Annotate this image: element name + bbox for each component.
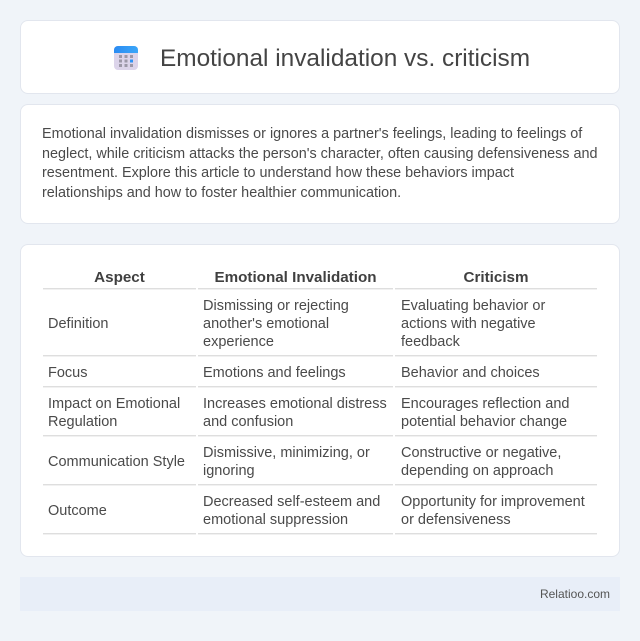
row: Communication Style: Communication Style (48, 454, 185, 470)
panel: comparison table (20, 244, 620, 557)
intro text: Emotional invalidation dismisses or ignores a partner's feelings, leading to feelings of (42, 126, 582, 142)
comparison table: feedback (401, 334, 460, 350)
panel: title card (20, 20, 620, 94)
comparison table: and confusion (203, 414, 293, 430)
title: Emotional invalidation vs. criticism (160, 45, 530, 72)
comparison table: Evaluating behavior or (401, 298, 545, 314)
comparison table: another's emotional (203, 316, 329, 332)
header: Emotional Invalidation: Emotional Invalidation (214, 269, 376, 286)
comparison table: Behavior and choices (401, 365, 540, 381)
intro text: neglect, while criticism attacks the person's character, often causing defensiveness and (42, 146, 597, 162)
row: Outcome: Outcome (48, 503, 107, 519)
icon: calendar (114, 46, 138, 70)
intro text: relationships and how to foster healthier communication. (42, 184, 401, 200)
comparison table: actions with negative (401, 316, 536, 332)
comparison table: Encourages reflection and (401, 396, 569, 412)
row: Impact on Emotional Regulation: Impact on Emotional (48, 396, 180, 412)
footer bar (20, 577, 620, 611)
footer text: Relatioo.com (540, 587, 610, 601)
comparison table: Constructive or negative, (401, 445, 561, 461)
intro text (42, 126, 597, 200)
header: Criticism: Criticism (464, 269, 528, 286)
comparison table: ignoring (203, 463, 255, 479)
comparison table: emotional suppression (203, 512, 348, 528)
comparison table: Opportunity for improvement (401, 494, 585, 510)
comparison table: Decreased self-esteem and (203, 494, 380, 510)
header: Aspect: Aspect (94, 269, 145, 286)
comparison table: Dismissive, minimizing, or (203, 445, 370, 461)
comparison table: Regulation (48, 414, 117, 430)
intro text: resentment. Explore this article to understand how these behaviors impact (42, 165, 514, 181)
comparison table: potential behavior change (401, 414, 567, 430)
panel: introduction (20, 104, 620, 224)
row: Definition: Definition (48, 316, 108, 332)
comparison table: Emotions and feelings (203, 365, 346, 381)
comparison table: Increases emotional distress (203, 396, 387, 412)
comparison table: or defensiveness (401, 512, 511, 528)
comparison table: experience (203, 334, 274, 350)
comparison table: Dismissing or rejecting (203, 298, 349, 314)
row: Focus: Focus (48, 365, 88, 381)
comparison table: depending on approach (401, 463, 553, 479)
